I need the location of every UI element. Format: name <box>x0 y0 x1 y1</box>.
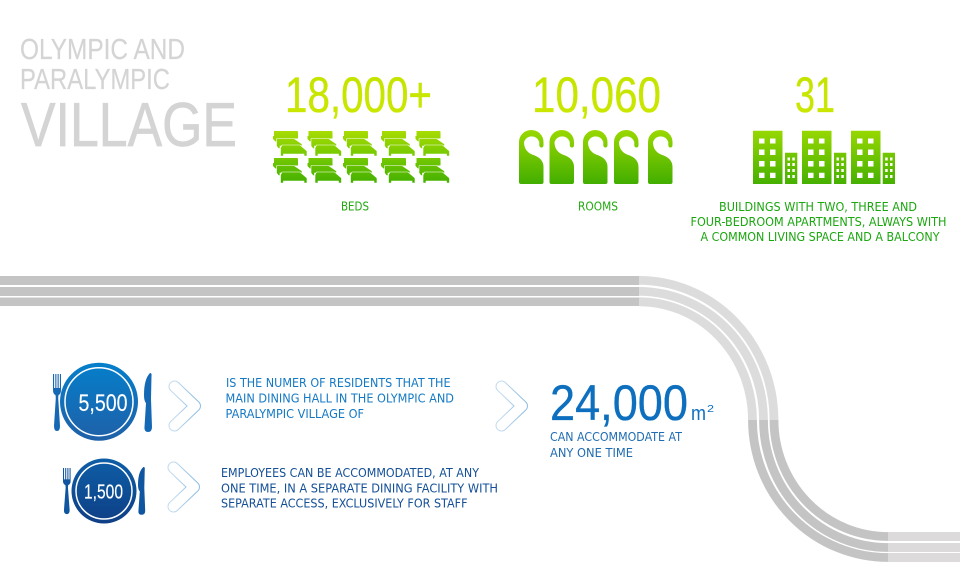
stat: 24,000 m2: ANY ONE TIME <box>550 445 633 460</box>
stat: beds <box>273 67 450 214</box>
buildings description: BUILDINGS WITH TWO, THREE AND <box>719 199 917 214</box>
arrow: chevron 2 <box>502 386 522 426</box>
icon: plate 5,500: 5,500 <box>78 390 128 417</box>
title: PARALYMPIC <box>20 64 170 96</box>
text: main dining hall: MAIN DINING HALL IN THE OLYMPIC AND <box>226 391 454 406</box>
icon: plate 1,500 <box>63 458 145 524</box>
text: employees <box>221 465 498 510</box>
stat: beds: BEDS <box>341 198 369 214</box>
stat: 24,000 m2: 2 <box>707 404 715 415</box>
stat: beds: 18,000+ <box>285 67 432 123</box>
stat: rooms: 10,060 <box>532 67 661 123</box>
stat: 24,000 m2 <box>550 375 715 460</box>
text: employees: ONE TIME, IN A SEPARATE DINING FACILITY WITH <box>221 481 498 496</box>
title: VILLAGE <box>21 91 237 160</box>
icon: plate 1,500: 1,500 <box>84 482 123 504</box>
stat: buildings: 31 <box>795 67 835 123</box>
title <box>20 34 237 160</box>
stat: 24,000 m2: 24,000 <box>550 375 688 431</box>
text: main dining hall: IS THE NUMER OF RESIDENTS THAT THE <box>226 375 451 390</box>
icon: door hangers <box>519 130 672 184</box>
buildings description <box>690 199 946 244</box>
text: main dining hall: PARALYMPIC VILLAGE OF <box>226 406 364 421</box>
running track divider <box>0 276 960 562</box>
arrow: chevron 3 <box>174 468 194 506</box>
text: employees: SEPARATE ACCESS, EXCLUSIVELY FOR STAFF <box>221 496 468 510</box>
stat: rooms <box>519 67 672 214</box>
title: OLYMPIC AND <box>20 34 185 66</box>
stat: 24,000 m2: m <box>691 403 706 425</box>
icon: buildings <box>753 131 895 184</box>
icon: rows of beds <box>273 131 450 183</box>
stat: buildings <box>690 67 946 244</box>
stat: rooms: ROOMS <box>578 198 618 214</box>
arrow: chevron 1 <box>174 386 195 426</box>
stat: 24,000 m2: CAN ACCOMMODATE AT <box>550 429 682 444</box>
icon: plate 5,500 <box>53 363 152 441</box>
text: main dining hall <box>226 375 454 421</box>
text: employees: EMPLOYEES CAN BE ACCOMMODATED, AT ANY <box>221 465 479 480</box>
